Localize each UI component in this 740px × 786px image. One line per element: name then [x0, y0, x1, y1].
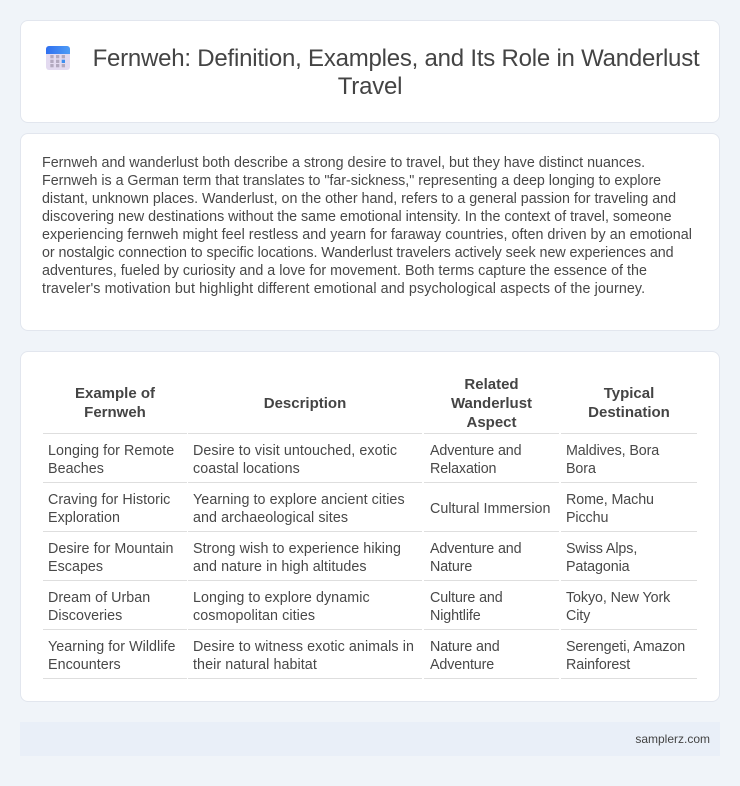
title: Fernweh: Definition, Examples, and Its Role in Wanderlust [93, 45, 699, 72]
table header: Aspect [466, 414, 517, 431]
table row: wildlife encounters: Serengeti, Amazon [566, 639, 685, 655]
table row: remote beaches: Relaxation [430, 461, 496, 477]
table row: wildlife encounters: Desire to witness exotic animals in [193, 639, 414, 655]
table row: urban discoveries: Dream of Urban [48, 590, 150, 606]
panel: intro text [20, 133, 720, 331]
text block: intro paragraph: adventures, fueled by curiosity and a love for movement. Both terms capture the essence of the [42, 263, 647, 279]
table row: historic exploration: Rome, Machu [566, 492, 654, 508]
table row: remote beaches: Desire to visit untouched, exotic [193, 443, 397, 459]
table row: wildlife encounters: Adventure [430, 657, 494, 673]
table row: mountain escapes: Desire for Mountain [48, 541, 174, 557]
table row: urban discoveries: cosmopolitan cities [193, 608, 315, 624]
table row: remote beaches [48, 443, 660, 477]
text block: intro paragraph: or nostalgic connection to specific locations. Wanderlust travelers actively seek new experiences and [42, 245, 674, 261]
table header: Wanderlust [451, 395, 532, 412]
table row: urban discoveries: Tokyo, New York [566, 590, 670, 606]
table row: historic exploration: and archaeological sites [193, 510, 348, 526]
footer credit: samplerz.com [635, 732, 710, 746]
text block: intro paragraph: Fernweh is a German term that translates to "far-sickness," representing a deep longing to explore [42, 173, 661, 189]
table row: historic exploration: Picchu [566, 510, 608, 526]
table row: mountain escapes: Swiss Alps, [566, 541, 637, 557]
table row: remote beaches: Beaches [48, 461, 104, 477]
text block: intro paragraph: experiencing fernweh might feel restless and yearn for faraway countries, often driven by an emotional [42, 227, 692, 243]
table row: mountain escapes: Nature [430, 559, 472, 575]
table header: Fernweh [84, 404, 146, 421]
table row: wildlife encounters [48, 639, 685, 673]
title [93, 45, 700, 100]
table row: mountain escapes: Adventure and [430, 541, 521, 557]
table header: Typical [604, 385, 654, 402]
table row: urban discoveries [48, 590, 670, 624]
table [43, 376, 697, 679]
table row: urban discoveries: Longing to explore dynamic [193, 590, 370, 606]
table row: wildlife encounters: Yearning for Wildlife [48, 639, 175, 655]
table row: mountain escapes: and nature in high altitudes [193, 559, 367, 575]
table row: mountain escapes: Patagonia [566, 559, 630, 575]
table row: remote beaches: Longing for Remote [48, 443, 174, 459]
table row: mountain escapes: Strong wish to experience hiking [193, 541, 401, 557]
text block: intro paragraph: traveler's motivation but highlight different emotional and psychological aspects of the journey. [42, 281, 645, 297]
footer [20, 722, 720, 756]
table row: urban discoveries: Culture and [430, 590, 503, 606]
text block: intro paragraph: distant, unknown places. Wanderlust, on the other hand, refers to a general passion for traveling and [42, 191, 676, 207]
table row: urban discoveries: Discoveries [48, 608, 122, 624]
table row: mountain escapes [48, 541, 637, 575]
title: Travel [338, 73, 402, 100]
table row: wildlife encounters: their natural habitat [193, 657, 317, 673]
table row: historic exploration: Yearning to explore ancient cities [193, 492, 405, 508]
table row: remote beaches: Adventure and [430, 443, 521, 459]
table row: wildlife encounters: Nature and [430, 639, 500, 655]
table row: mountain escapes: Escapes [48, 559, 103, 575]
text block: intro paragraph [42, 155, 692, 297]
table row: remote beaches: Maldives, Bora [566, 443, 659, 459]
text block: intro paragraph: discovering new destinations without the same emotional intensity. In the context of travel, someone [42, 209, 672, 225]
table header [75, 376, 670, 431]
panel: table card [20, 351, 720, 702]
table header: Description [264, 395, 346, 412]
table row: historic exploration: Cultural Immersion [430, 501, 551, 517]
table row: historic exploration: Exploration [48, 510, 120, 526]
text block: intro paragraph: Fernweh and wanderlust both describe a strong desire to travel, but they have distinct nuances. [42, 155, 645, 171]
table row: urban discoveries: City [566, 608, 590, 624]
table header: Destination [588, 404, 670, 421]
table row: remote beaches: Bora [566, 461, 596, 477]
table row: historic exploration [48, 492, 654, 526]
table row: urban discoveries: Nightlife [430, 608, 481, 624]
icon: calendar [46, 46, 70, 70]
panel: header card [20, 20, 720, 123]
table header: Related [464, 376, 519, 393]
table row: remote beaches: coastal locations [193, 461, 300, 477]
table row: historic exploration: Craving for Historic [48, 492, 170, 508]
table header: Example of [75, 385, 155, 402]
table row: wildlife encounters: Rainforest [566, 657, 630, 673]
table row: wildlife encounters: Encounters [48, 657, 121, 673]
